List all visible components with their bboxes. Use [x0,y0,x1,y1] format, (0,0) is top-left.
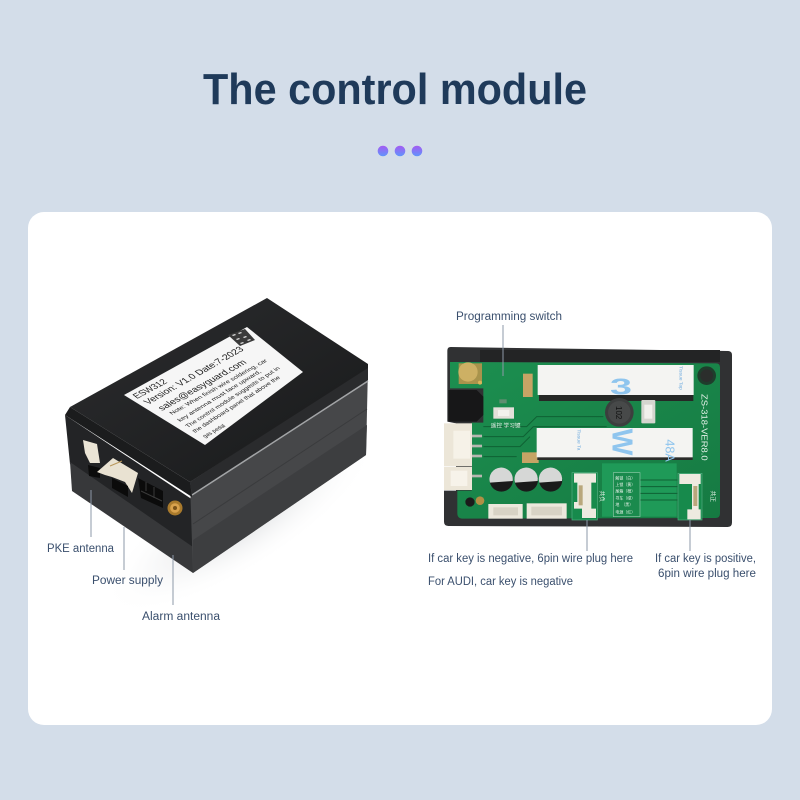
product photo: closed control module [65,298,402,647]
callout line: positive plug [689,520,691,551]
note: AUDI: For AUDI, car key is negative [428,576,573,588]
wire colour table: 解锁（白） [615,474,635,480]
inductor: 102 [614,406,623,420]
inductor [605,398,634,427]
connector: black socket [138,478,163,508]
tape strip upper: 3 [610,373,632,399]
tape strip upper [538,365,694,401]
6pin socket: positive [678,473,702,520]
wire colour table: 电源（红） [615,508,635,514]
callout line: alarm antenna [172,555,174,605]
callout label: power supply: Power supply [92,575,163,587]
label text: the dashboard panel that above the [191,375,283,434]
callout line: negative plug [586,520,588,551]
black header [448,390,483,422]
wire colour table: 地 （黑） [615,501,633,507]
programming switch: 遥控 学习键 [491,421,521,429]
wire colour table: 尾箱（橙） [615,488,635,494]
callout line: power supply [123,527,125,570]
label text: gas pedal [201,423,227,439]
socket markings: 共负 [598,491,606,502]
gold pads [522,374,539,463]
tape strip lower: Tissue Ta [575,429,581,451]
connector: gold SMA alarm antenna [168,500,182,516]
wire colour table [613,473,640,517]
socket markings [598,491,717,502]
callout label: positive plug: 6pin wire plug here [658,568,756,580]
white product label [124,327,303,445]
bottom white connectors [488,503,567,519]
tape strip upper: Tissue Tap [677,366,683,390]
gold antenna pad [458,362,482,385]
tape strip lower: W [606,429,638,456]
QR code [228,329,255,346]
connector: PKE antenna plug [83,440,100,478]
tape strip lower [537,428,693,462]
label text: The control module suggests to put in [184,365,282,429]
label text: Note: When finish wire soldering, car [168,358,269,416]
panel: white card [28,212,772,725]
callout line: PKE antenna [90,490,92,537]
label text: sales@easyguard.com [156,358,250,413]
callout label: positive plug [655,553,756,580]
socket markings: 共正 [709,491,717,502]
label text: ESW312 [131,378,170,401]
module top lid [70,298,368,482]
label text [131,345,283,439]
white connectors left [444,423,482,490]
callout label: PKE antenna: PKE antenna [47,543,115,555]
callout label: negative plug: If car key is negative, 6pin wire plug here [428,553,633,565]
module side face [190,367,368,573]
title: The control module [203,65,587,114]
label text: Version: V1.0 Date:7-2023 [142,345,247,407]
tact switch [641,400,655,423]
callout label: alarm antenna: Alarm antenna [142,611,221,623]
module front face [65,415,193,573]
bottom screw [465,496,484,507]
programming switch [491,399,521,429]
label text: key antenna must face upward, [176,369,263,423]
decorative three dots [378,146,422,156]
capacitors [489,468,562,492]
wire colour table: 上锁（黄） [615,481,635,487]
housing [444,347,732,527]
wire colour table: 寻车（绿） [615,494,635,500]
callout line: programming switch [502,325,504,376]
callout label: positive plug: If car key is positive, [655,553,756,565]
connector: power supply plug [97,458,138,497]
board version text: ZS-318-VER8.0 [700,394,709,461]
screw hole [697,366,716,385]
callout label: programming switch: Programming switch [456,311,562,323]
product photo: open circuit board [444,347,732,527]
tape strip lower: 48A [662,439,676,462]
circuit board [450,362,720,519]
6pin socket: negative [572,473,597,520]
